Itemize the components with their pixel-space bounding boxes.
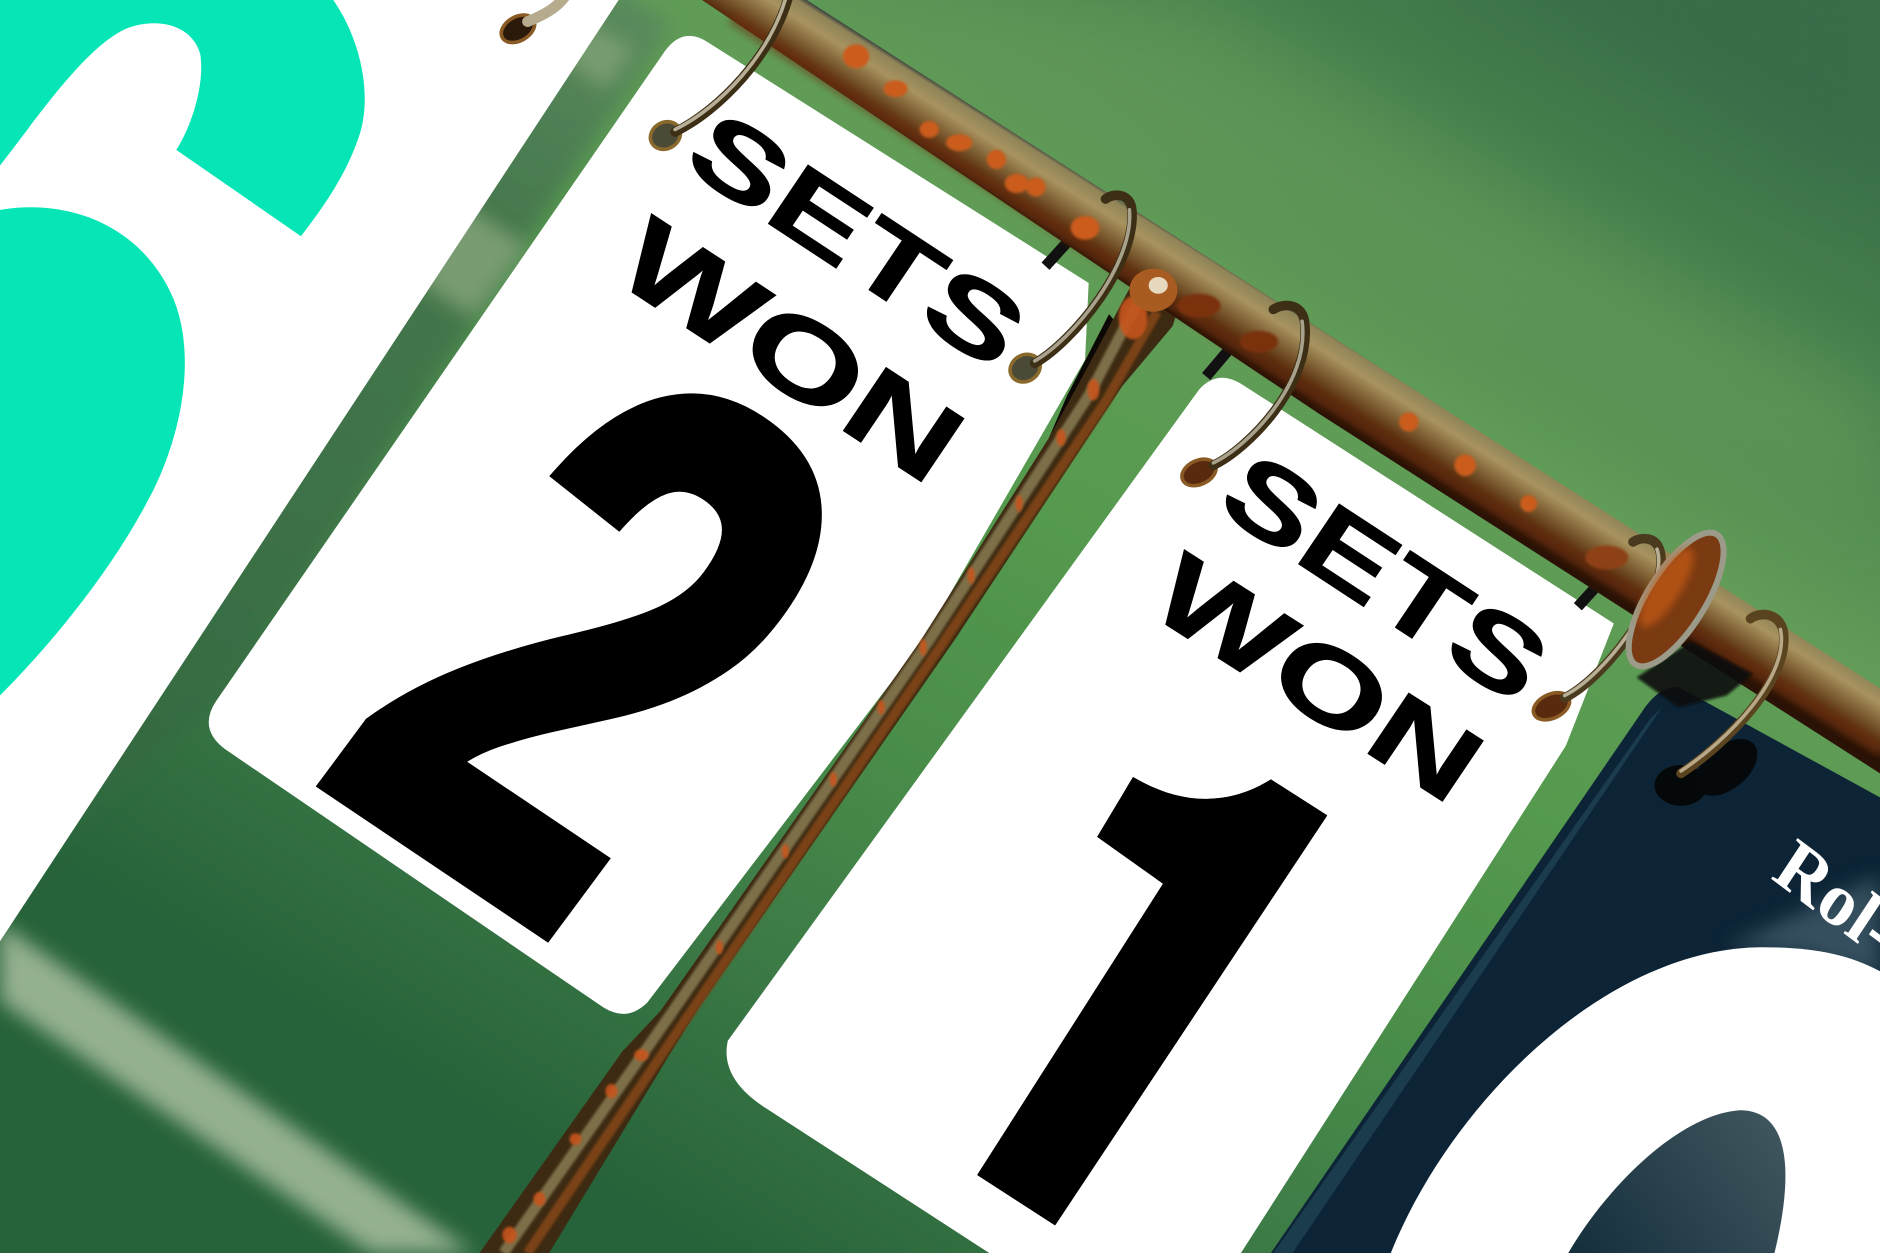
card: left with teal numeral [0,0,619,941]
hole punch [1655,765,1707,806]
numeral: 2: 2 [213,211,983,1076]
ring 1 [496,0,566,48]
label: won: WON [1131,532,1504,825]
ring 2 [645,0,789,155]
rings [496,0,1784,773]
vertical post [480,282,1181,1253]
post shadow on card [1046,314,1127,446]
horizontal rail [693,0,1880,773]
card: sets won 2 [209,36,1089,1076]
washer [1611,519,1741,680]
shadow behind washer [1637,641,1753,707]
hanging tabs [1046,240,1602,607]
label: sets: SETS [1200,430,1570,726]
white numeral 0 [1391,947,1880,1253]
ring 4 [1178,306,1305,491]
numeral counter [1568,1110,1785,1253]
card: sets won 1 [726,378,1614,1253]
teal numeral upper part [0,0,365,236]
teal numeral lower part [0,207,185,695]
ring 3 [1005,195,1132,387]
ring 6 [1681,615,1784,773]
ring 5 [1529,539,1661,725]
card: dark with score 0 [1271,687,1880,1253]
label: won: WON [596,194,986,507]
label: sets: SETS [667,88,1047,391]
